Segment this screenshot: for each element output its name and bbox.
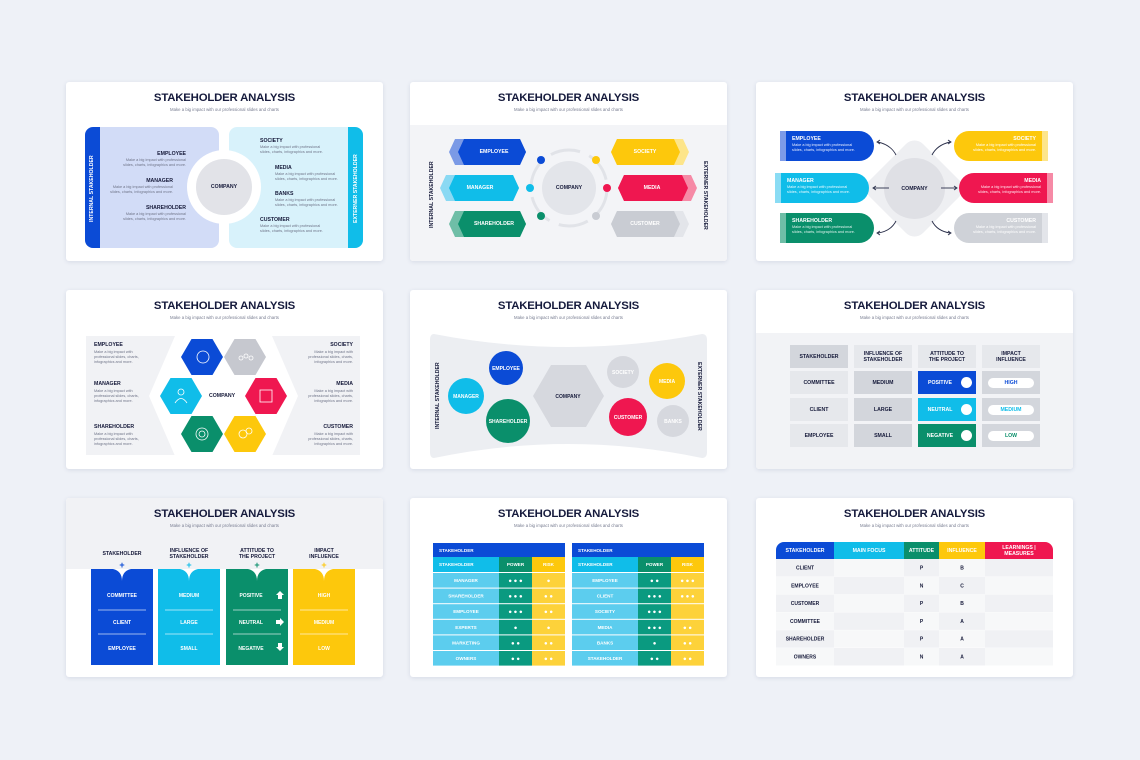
card 2: pills around company [410, 82, 727, 261]
tables: ● ● [544, 656, 553, 662]
diagram: MEDIA [644, 185, 660, 191]
diagram: INTERNAL STAKEHOLDER [435, 363, 441, 429]
diagram: Make a big impact with professional [976, 225, 1036, 229]
tables: ● ● [544, 610, 553, 616]
columns: STAKEHOLDER [169, 554, 209, 560]
panel: internal: slides, charts, infographics and more. [123, 163, 186, 167]
panel: internal: Make a big impact with professional [126, 158, 186, 162]
diagram: infographics and more. [94, 442, 133, 446]
diagram [86, 336, 360, 455]
tables: CLIENT [597, 594, 613, 599]
table: B [960, 601, 964, 607]
tables: ● ● ● [647, 610, 662, 616]
diagram: SOCIETY [634, 149, 656, 155]
diagram: EMPLOYEE [792, 136, 821, 142]
subtitle: Make a big impact with our professional slides and charts [860, 315, 969, 320]
tables: ● ● ● [647, 594, 662, 600]
subtitle: Make a big impact with our professional slides and charts [170, 315, 279, 320]
grid table [756, 333, 1073, 469]
columns: INFLUENCE OF [170, 548, 208, 554]
columns: MEDIUM [314, 620, 334, 626]
diagram: professional slides, charts, [94, 437, 139, 441]
diagram: MANAGER [94, 381, 121, 387]
tables: ● ● ● [680, 578, 695, 584]
table: LEARNINGS | [1002, 544, 1036, 550]
panel: internal: slides, charts, infographics and more. [110, 190, 173, 194]
table: ATTITUDE [909, 548, 934, 554]
diagram: infographics and more. [314, 399, 353, 403]
columns: SMALL [180, 646, 198, 652]
columns: MEDIUM [179, 593, 199, 599]
panel: external: Make a big impact with professional [260, 224, 320, 228]
tables: POWER [507, 562, 525, 567]
diagram: EMPLOYEE [492, 366, 521, 372]
tables: ● ● ● [508, 578, 523, 584]
table: A [960, 654, 964, 660]
panel: external [229, 127, 363, 248]
panel: external: slides, charts, infographics and more. [275, 177, 338, 181]
grid table: IMPACT [1001, 350, 1021, 356]
panel: internal: Make a big impact with professional [126, 212, 186, 216]
diagram: SHAREHOLDER [489, 419, 528, 425]
columns: STAKEHOLDER [102, 551, 142, 557]
grid table: EMPLOYEE [805, 432, 833, 438]
tables: MEDIA [598, 625, 613, 630]
diagram: slides, charts, infographics and more. [973, 230, 1036, 234]
tables: MANAGER [454, 578, 479, 583]
diagram: Make a big impact with professional [792, 225, 852, 229]
grid table: STAKEHOLDER [863, 356, 903, 362]
title: STAKEHOLDER ANALYSIS [154, 508, 295, 520]
card 8: power/risk tables [410, 498, 727, 677]
panel: external: Make a big impact with professional [275, 172, 335, 176]
diagram: EXTERNER STAKEHOLDER [696, 362, 702, 430]
title: STAKEHOLDER ANALYSIS [498, 508, 639, 520]
table: STAKEHOLDER [785, 548, 825, 554]
grid table: HIGH [1005, 380, 1017, 386]
tables: STAKEHOLDER [578, 562, 613, 567]
diagram: MANAGER [467, 185, 493, 191]
grid table: SMALL [874, 432, 892, 438]
diagram: EMPLOYEE [480, 149, 508, 155]
diagram: slides, charts, infographics and more. [973, 148, 1036, 152]
diagram: professional slides, charts, [94, 394, 139, 398]
tables: EXPERTS [455, 625, 477, 630]
diagram: Make a big impact with professional [792, 143, 852, 147]
diagram: slides, charts, infographics and more. [792, 230, 855, 234]
tables: ● ● ● [508, 610, 523, 616]
tables: STAKEHOLDER [578, 548, 613, 553]
table: COMMITTEE [790, 619, 821, 625]
table: P [920, 637, 924, 643]
table: B [960, 566, 964, 572]
grid table: MEDIUM [1000, 407, 1022, 413]
table: EMPLOYEE [791, 583, 820, 589]
title: STAKEHOLDER ANALYSIS [844, 508, 985, 520]
columns: EMPLOYEE [108, 646, 137, 652]
columns: INFLUENCE [309, 554, 339, 560]
diagram: SOCIETY [330, 342, 353, 348]
card 3: rounded boxes with arrows [756, 82, 1073, 261]
columns: ATTITUDE TO [240, 548, 274, 554]
panel: external: slides, charts, infographics and more. [260, 150, 323, 154]
tables: ● ● [544, 594, 553, 600]
panel: external: SOCIETY [260, 138, 283, 144]
tables: ● ● ● [647, 625, 662, 631]
diagram: SOCIETY [1013, 136, 1036, 142]
diagram: SHAREHOLDER [792, 218, 832, 224]
tables: MARKETING [452, 640, 480, 645]
columns: COMMITTEE [107, 593, 138, 599]
tables: ● ● [544, 641, 553, 647]
subtitle: Make a big impact with our professional slides and charts [514, 315, 623, 320]
diagram: EXTERNER STAKEHOLDER [702, 161, 708, 229]
columns: LARGE [180, 620, 198, 626]
panel: external: MEDIA [275, 165, 292, 171]
diagram: CUSTOMER [1006, 218, 1036, 224]
tables: RISK [543, 562, 555, 567]
diagram: MEDIA [336, 381, 353, 387]
title: STAKEHOLDER ANALYSIS [498, 300, 639, 312]
diagram: Make a big impact with [94, 350, 133, 354]
diagram: professional slides, charts, [308, 437, 353, 441]
columns: POSITIVE [239, 593, 263, 599]
card 6: attitude grid [756, 290, 1073, 469]
tables: EMPLOYEE [453, 609, 479, 614]
panel: external: slides, charts, infographics and more. [275, 203, 338, 207]
card 1: stakeholder split panels [66, 82, 383, 261]
diagram: CUSTOMER [614, 415, 643, 421]
tables: STAKEHOLDER [439, 562, 474, 567]
columns: THE PROJECT [239, 554, 275, 560]
diagram: MEDIA [1024, 178, 1041, 184]
diagram: MANAGER [787, 178, 814, 184]
diagram: professional slides, charts, [308, 394, 353, 398]
columns: + [119, 560, 125, 570]
card 4: hexagons [66, 290, 383, 469]
subtitle: Make a big impact with our professional slides and charts [860, 523, 969, 528]
columns: + [321, 560, 327, 570]
diagram: COMPANY [555, 394, 581, 400]
columns: LOW [318, 646, 330, 652]
card 9: learnings table [756, 498, 1073, 677]
diagram: infographics and more. [94, 399, 133, 403]
diagram: Make a big impact with [314, 350, 353, 354]
grid table: NEGATIVE [927, 432, 953, 438]
tables: ● ● [650, 656, 659, 662]
tables: ● ● ● [508, 594, 523, 600]
company circle: COMPANY [211, 184, 237, 190]
diagram: SHAREHOLDER [94, 424, 134, 430]
tables: ● [653, 641, 657, 647]
panel: internal: EMPLOYEE [157, 151, 186, 157]
panel: internal: INTERNAL STAKEHOLDER [89, 156, 95, 222]
columns: NEUTRAL [239, 620, 263, 626]
tables: SOCIETY [595, 609, 615, 614]
grid table: STAKEHOLDER [799, 354, 839, 360]
title: STAKEHOLDER ANALYSIS [844, 92, 985, 104]
panel: external: Make a big impact with professional [260, 145, 320, 149]
title: STAKEHOLDER ANALYSIS [844, 300, 985, 312]
diagram: CUSTOMER [323, 424, 353, 430]
diagram: Make a big impact with [94, 389, 133, 393]
diagram: Make a big impact with professional [976, 143, 1036, 147]
grid table: CLIENT [810, 406, 828, 412]
grid table: COMMITTEE [803, 380, 835, 386]
diagram: infographics and more. [314, 360, 353, 364]
diagram: INTERNAL STAKEHOLDER [429, 162, 435, 228]
table: P [920, 566, 924, 572]
panel: external: BANKS [275, 191, 293, 197]
panel: external: slides, charts, infographics and more. [260, 229, 323, 233]
table: SHAREHOLDER [786, 637, 825, 643]
subtitle: Make a big impact with our professional slides and charts [514, 107, 623, 112]
panel: internal [85, 127, 219, 248]
columns: + [254, 560, 260, 570]
diagram: COMPANY [209, 393, 235, 399]
tables: ● ● [683, 625, 692, 631]
table: INFLUENCE [947, 548, 977, 554]
grid table: NEUTRAL [928, 406, 952, 412]
columns: IMPACT [314, 548, 334, 554]
title: STAKEHOLDER ANALYSIS [498, 92, 639, 104]
diagram [410, 125, 727, 261]
table: P [920, 601, 924, 607]
subtitle: Make a big impact with our professional slides and charts [860, 107, 969, 112]
tables: RISK [682, 562, 694, 567]
tables: EMPLOYEE [592, 578, 618, 583]
tables: ● ● [511, 656, 520, 662]
company circle [187, 150, 261, 224]
grid table: MEDIUM [872, 380, 894, 386]
grid table: LOW [1005, 433, 1017, 439]
table: C [960, 583, 964, 589]
tables: ● ● ● [680, 594, 695, 600]
diagram: Make a big impact with [314, 432, 353, 436]
panel: internal: Make a big impact with professional [113, 185, 173, 189]
diagram: Make a big impact with professional [787, 185, 847, 189]
tables: SHAREHOLDER [448, 594, 484, 599]
table: N [920, 654, 924, 660]
table: A [960, 619, 964, 625]
diagram: slides, charts, infographics and more. [787, 190, 850, 194]
diagram: infographics and more. [94, 360, 133, 364]
columns [91, 548, 355, 665]
table: OWNERS [794, 654, 817, 660]
columns: CLIENT [113, 620, 131, 626]
columns: NEGATIVE [238, 646, 264, 652]
tables: OWNERS [456, 656, 476, 661]
tables: ● ● [683, 641, 692, 647]
table: MAIN FOCUS [853, 548, 885, 554]
panel: internal: MANAGER [146, 178, 173, 184]
diagram: professional slides, charts, [94, 355, 139, 359]
table: CUSTOMER [791, 601, 820, 607]
grid table: LARGE [874, 406, 892, 412]
tables [433, 543, 704, 666]
card 7: four colored columns [66, 498, 383, 677]
grid table: INFLUENCE OF [864, 350, 902, 356]
diagram: Make a big impact with professional [981, 185, 1041, 189]
diagram [430, 334, 707, 458]
subtitle: Make a big impact with our professional slides and charts [170, 107, 279, 112]
diagram: CUSTOMER [630, 221, 660, 227]
table: A [960, 637, 964, 643]
tables: ● [547, 625, 551, 631]
panel: internal: slides, charts, infographics and more. [123, 217, 186, 221]
diagram: SOCIETY [612, 370, 635, 376]
table: MEASURES [1004, 550, 1034, 556]
title: STAKEHOLDER ANALYSIS [154, 92, 295, 104]
tables: ● [547, 578, 551, 584]
diagram: SHAREHOLDER [474, 221, 514, 227]
tables: BANKS [597, 640, 613, 645]
panel: internal: SHAREHOLDER [146, 205, 186, 211]
diagram [775, 131, 1053, 243]
grid table: POSITIVE [928, 380, 952, 386]
table: N [920, 583, 924, 589]
subtitle: Make a big impact with our professional slides and charts [514, 523, 623, 528]
panel: external: EXTERNER STAKEHOLDER [353, 155, 359, 223]
tables: STAKEHOLDER [439, 548, 474, 553]
diagram: professional slides, charts, [308, 355, 353, 359]
diagram: BANKS [664, 419, 683, 425]
grid table: THE PROJECT [929, 356, 965, 362]
table: P [920, 619, 924, 625]
diagram: infographics and more. [314, 442, 353, 446]
title: STAKEHOLDER ANALYSIS [154, 300, 295, 312]
tables: ● [514, 625, 518, 631]
diagram: MEDIA [659, 379, 675, 385]
tables: POWER [646, 562, 664, 567]
diagram: COMPANY [901, 186, 928, 192]
diagram: MANAGER [453, 394, 479, 400]
diagram: EMPLOYEE [94, 342, 123, 348]
diagram: Make a big impact with [94, 432, 133, 436]
tables: ● ● [650, 578, 659, 584]
tables: STAKEHOLDER [588, 656, 623, 661]
columns: + [186, 560, 192, 570]
tables: ● ● [683, 656, 692, 662]
card 5: bubbles bow-tie [410, 290, 727, 469]
grid table: ATTITUDE TO [930, 350, 964, 356]
grid table: INFLUENCE [996, 356, 1026, 362]
diagram: slides, charts, infographics and more. [792, 148, 855, 152]
table: CLIENT [796, 566, 814, 572]
panel: external: Make a big impact with professional [275, 198, 335, 202]
columns: HIGH [318, 593, 331, 599]
diagram: slides, charts, infographics and more. [978, 190, 1041, 194]
diagram: COMPANY [556, 185, 582, 191]
panel: external: CUSTOMER [260, 217, 290, 223]
diagram: Make a big impact with [314, 389, 353, 393]
subtitle: Make a big impact with our professional slides and charts [170, 523, 279, 528]
tables: ● ● [511, 641, 520, 647]
table [776, 542, 1053, 666]
